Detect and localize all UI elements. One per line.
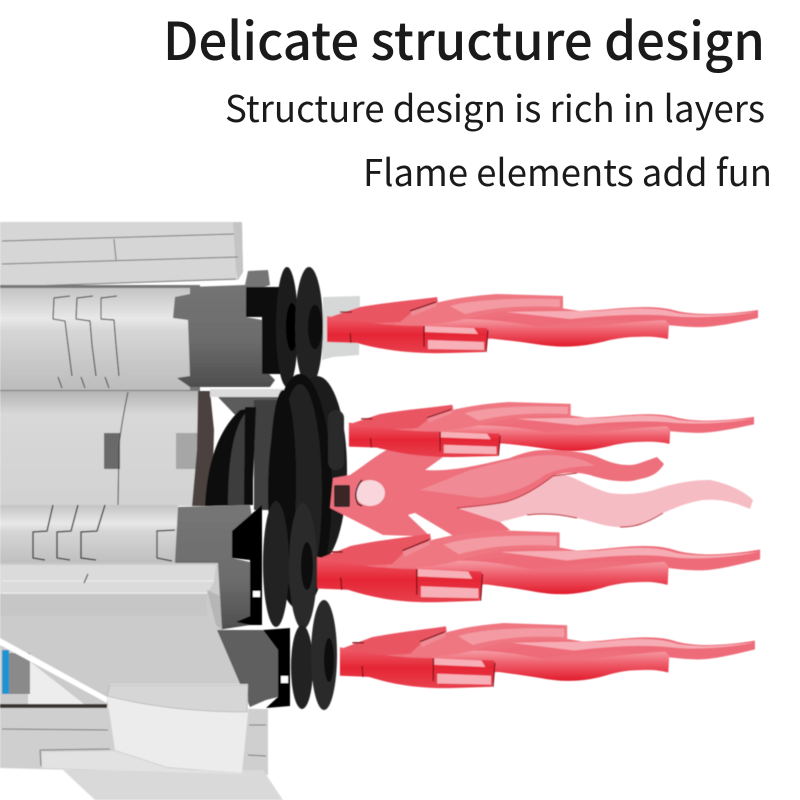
blue cockpit detail <box>0 638 107 704</box>
wing block top bevel <box>107 685 248 712</box>
subtitle: structure layers: Structure design is rich in layers <box>225 79 765 133</box>
wedge behind top flame <box>322 296 360 360</box>
flame three <box>317 530 760 602</box>
bottom hull <box>0 704 283 800</box>
upper nozzle discs <box>246 267 323 387</box>
title: Delicate structure design <box>163 0 765 75</box>
middle nozzle stack <box>205 374 347 610</box>
middle cylinder <box>0 389 295 506</box>
rocket engines illustration <box>0 222 760 800</box>
upper hull panel <box>0 222 243 287</box>
lower hull wing <box>0 563 248 707</box>
big flame <box>330 438 753 538</box>
lower dark collar <box>175 505 254 630</box>
upper cylinder <box>0 285 200 393</box>
flame four <box>340 623 755 688</box>
lower collar bottom <box>217 630 278 707</box>
lower nozzle discs <box>232 501 317 629</box>
white wing block <box>107 684 248 773</box>
lower cylinder <box>0 505 178 567</box>
upper dark collar <box>173 270 275 387</box>
subtitle: flame elements: Flame elements add fun <box>363 143 772 197</box>
flame two <box>349 402 754 457</box>
top flame <box>327 294 758 353</box>
bottom nozzle discs <box>263 600 337 710</box>
